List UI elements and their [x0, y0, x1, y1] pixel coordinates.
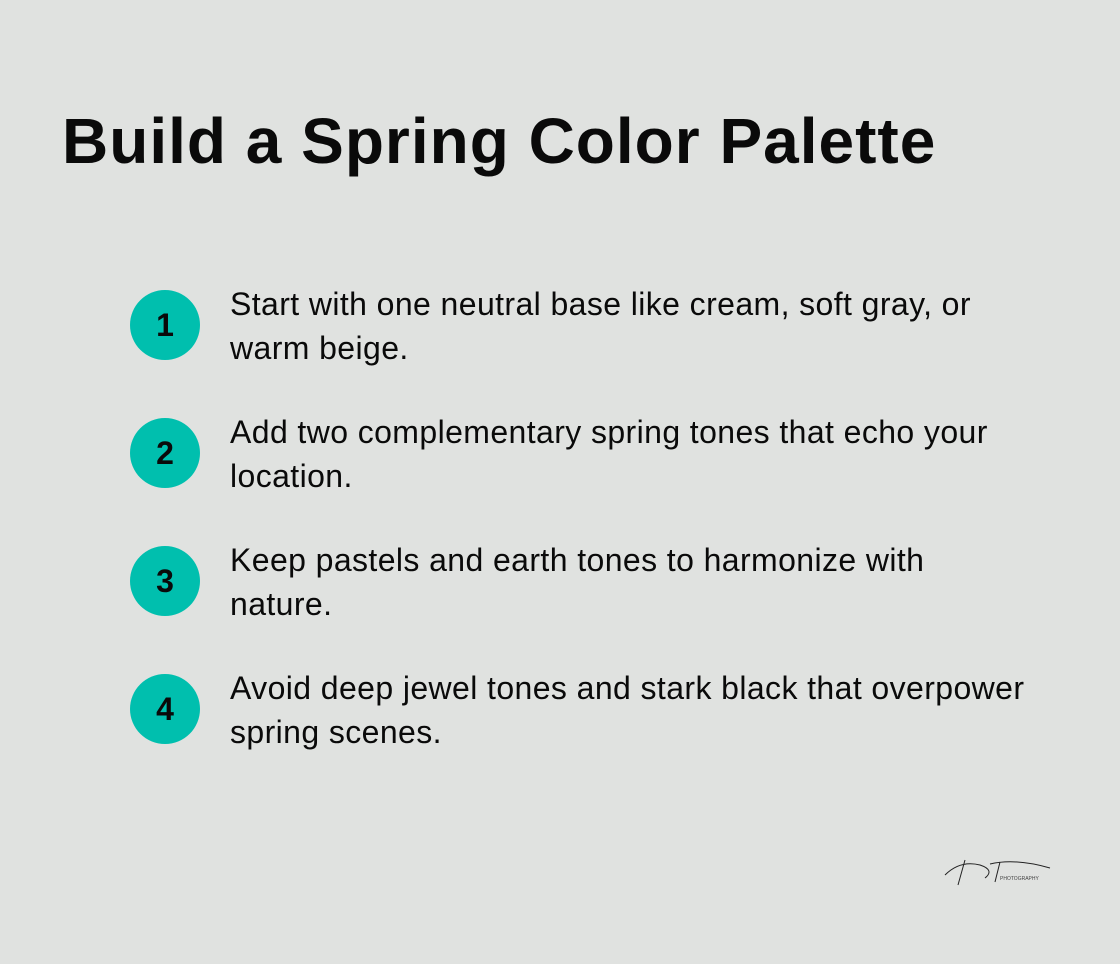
badge 3: 3: [156, 563, 174, 599]
text 1: [230, 286, 971, 366]
item 1: [130, 286, 971, 366]
text 3: Keep pastels and earth tones to harmonize with: [230, 542, 924, 578]
badge 1: [130, 290, 200, 360]
text 2: Add two complementary spring tones that echo your: [230, 414, 988, 450]
text 1: Start with one neutral base like cream, soft gray, or: [230, 286, 971, 322]
title: Build a Spring Color Palette: [62, 105, 936, 177]
text 2: location.: [230, 458, 353, 494]
logo signature: [944, 860, 1050, 886]
item 2: [130, 414, 988, 494]
item 3: [130, 542, 924, 622]
text 4: [230, 670, 1024, 750]
text 1: warm beige.: [230, 330, 409, 366]
badge 1: 1: [156, 307, 174, 343]
item 4: [130, 670, 1024, 750]
text 2: [230, 414, 988, 494]
text 4: spring scenes.: [230, 714, 442, 750]
badge 2: [130, 418, 200, 488]
badge 4: [130, 674, 200, 744]
text 3: nature.: [230, 586, 332, 622]
text 3: [230, 542, 924, 622]
logo signature: PHOTOGRAPHY: [1000, 876, 1039, 882]
badge 2: 2: [156, 435, 174, 471]
badge 4: 4: [156, 691, 174, 727]
badge 3: [130, 546, 200, 616]
text 4: Avoid deep jewel tones and stark black that overpower: [230, 670, 1024, 706]
